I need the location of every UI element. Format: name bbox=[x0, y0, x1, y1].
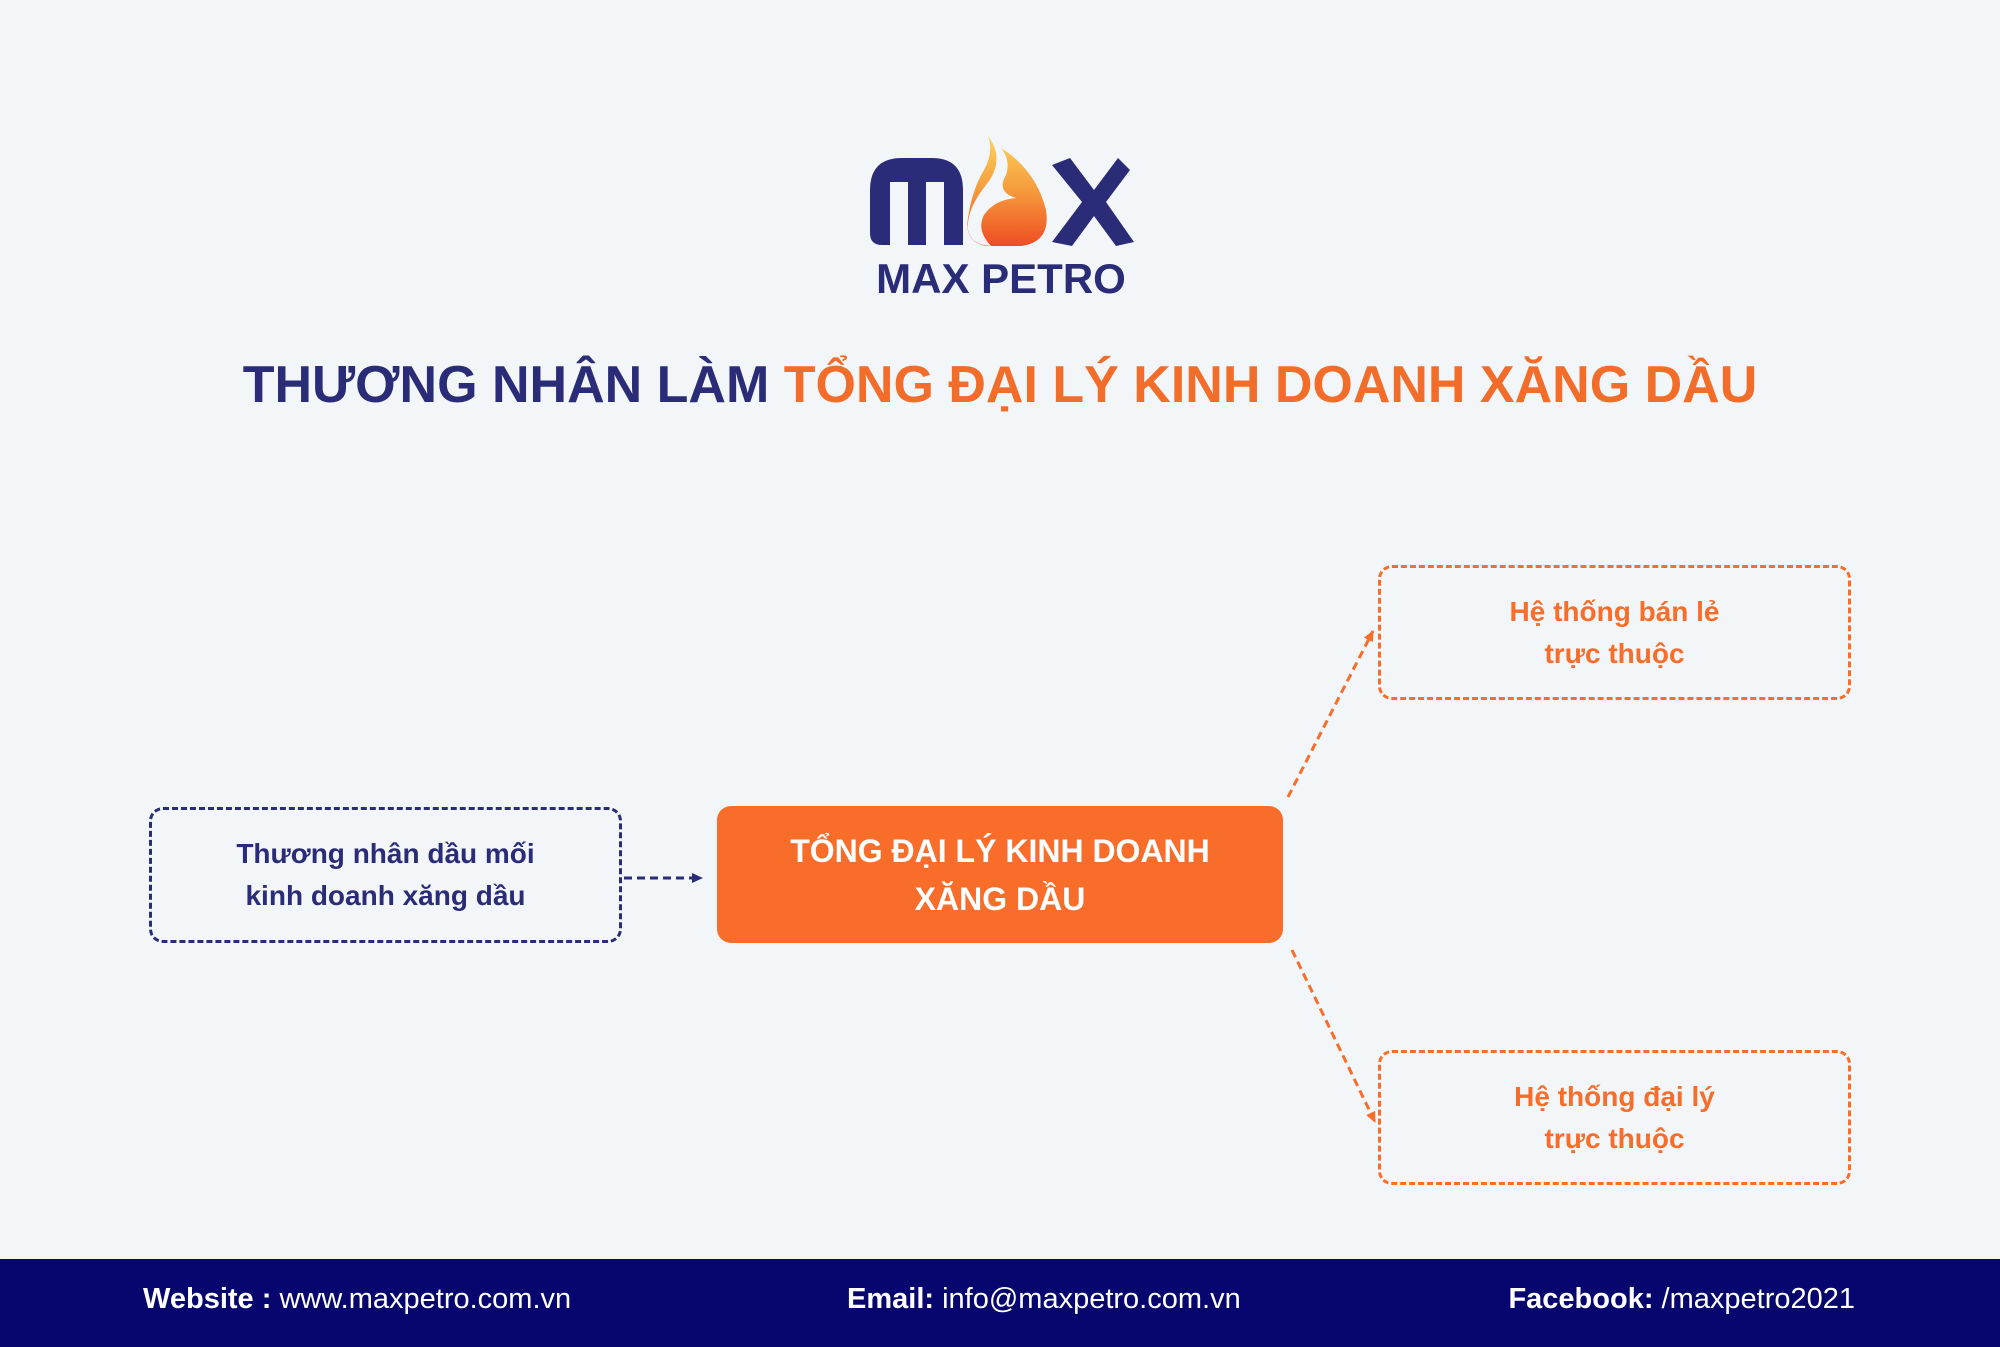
flame bbox=[967, 136, 1047, 246]
box: top right bbox=[1378, 565, 1851, 700]
box: bottom right bbox=[1378, 1050, 1851, 1185]
footer: Email: info@maxpetro.com.vn bbox=[847, 1283, 1241, 1315]
footer bbox=[0, 1259, 2000, 1347]
box: center bbox=[717, 806, 1283, 943]
box: top right: trực thuộc bbox=[1544, 638, 1685, 668]
box: center: TỔNG ĐẠI LÝ KINH DOANH bbox=[790, 832, 1210, 868]
box: bottom right: trực thuộc bbox=[1544, 1122, 1685, 1154]
M bbox=[870, 158, 963, 245]
title: THƯƠNG NHÂN LÀM TỔNG ĐẠI LÝ KINH DOANH XĂNG DẦU bbox=[243, 356, 1757, 414]
box: left source: kinh doanh xăng dầu bbox=[245, 880, 526, 911]
box: center: XĂNG DẦU bbox=[915, 880, 1085, 916]
footer: Facebook: /maxpetro2021 bbox=[1508, 1283, 1855, 1315]
box: left source bbox=[149, 807, 622, 943]
arrow: center to top right bbox=[1288, 631, 1373, 797]
footer: Website : www.maxpetro.com.vn bbox=[143, 1283, 571, 1315]
arrow: left to center bbox=[624, 876, 702, 880]
X bbox=[1052, 158, 1134, 246]
logo bbox=[870, 136, 1134, 300]
box: top right: Hệ thống bán lẻ bbox=[1510, 596, 1720, 626]
box: left source: Thương nhân dầu mối bbox=[236, 838, 535, 869]
arrow: center to bottom right bbox=[1292, 950, 1375, 1122]
box: bottom right: Hệ thống đại lý bbox=[1514, 1080, 1715, 1112]
